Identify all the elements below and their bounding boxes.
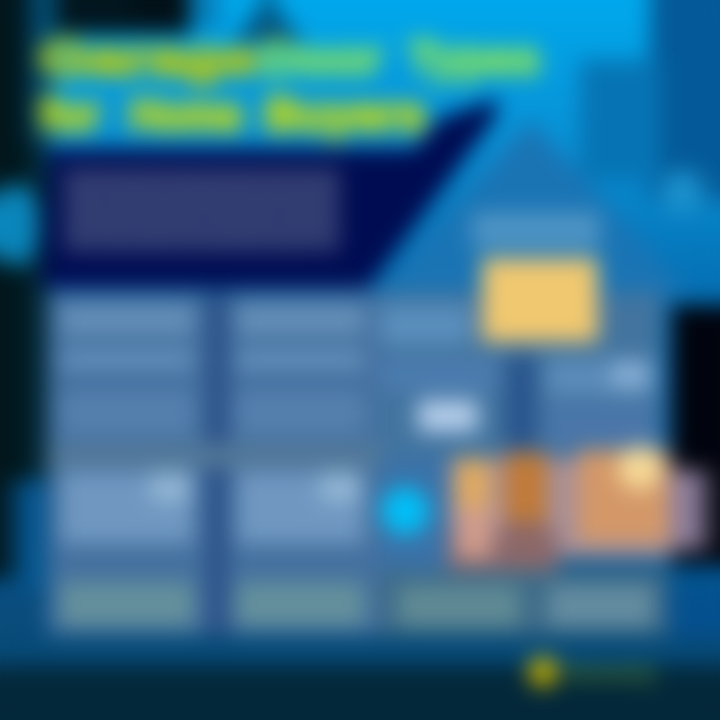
title: Home — [130, 88, 242, 140]
body text block: style, security and value to your home. — [64, 191, 340, 208]
lit upper window — [482, 258, 598, 342]
logo wordmark: Homely — [564, 660, 657, 685]
garage doors — [48, 292, 380, 637]
lit front door and windows — [448, 446, 672, 570]
footer logo — [528, 657, 657, 687]
body text block: Compare materials, insulation, designs — [64, 213, 340, 230]
body text block: Choosing the right garage door adds — [64, 169, 340, 186]
ground footer band — [0, 635, 720, 720]
title: Buyers — [265, 88, 425, 140]
panel: navy roof — [42, 98, 498, 288]
body text block: and costs before you decide to buy. — [64, 235, 304, 252]
garage door panels: left — [60, 305, 194, 626]
garage door panels: right — [236, 305, 364, 626]
icon: logo mark — [528, 657, 558, 687]
title — [40, 32, 540, 140]
title: for — [40, 88, 100, 140]
title: Door — [262, 32, 382, 84]
front steps and foundation — [0, 570, 720, 640]
house: right gable and wall — [375, 120, 705, 582]
cyan accent dot — [381, 487, 429, 535]
title: Types — [408, 32, 540, 84]
body text block — [64, 168, 340, 252]
title: Garage — [40, 32, 258, 84]
